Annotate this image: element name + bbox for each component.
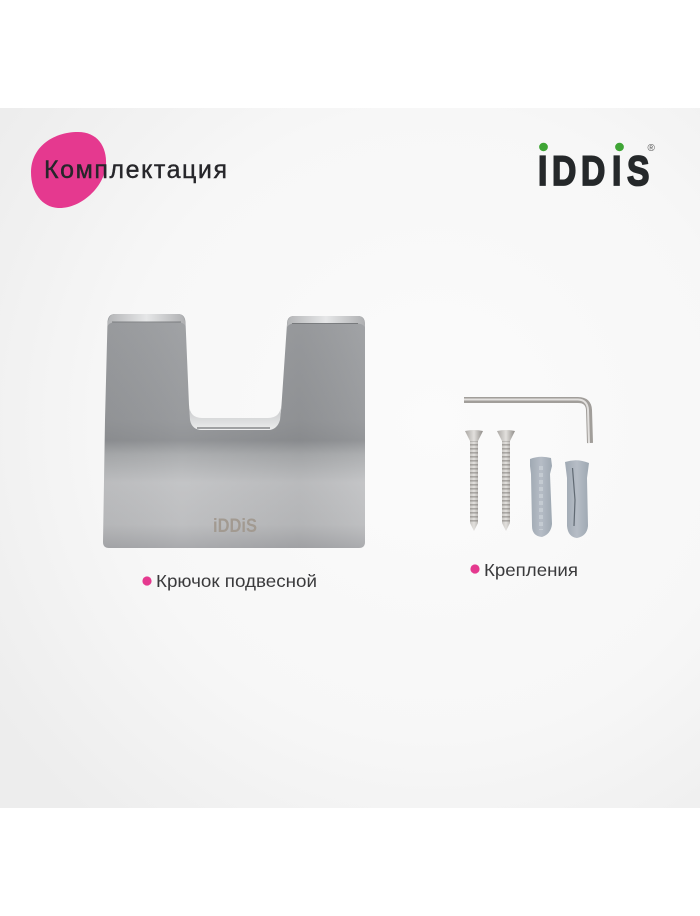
hardware: mounting set bbox=[464, 400, 590, 538]
notch chrome lip bbox=[189, 405, 282, 430]
heading text: Комплектация bbox=[44, 156, 227, 184]
left arm chrome top bbox=[108, 314, 186, 326]
icon: hex key bbox=[464, 400, 590, 443]
right arm chrome top bbox=[287, 316, 365, 327]
label text: Крепления bbox=[484, 560, 578, 580]
registered mark: ® bbox=[648, 143, 656, 154]
engraved logo: iDDiS bbox=[213, 516, 257, 537]
bullet bbox=[142, 576, 152, 586]
logo wordmark: IDDIS bbox=[538, 149, 649, 195]
icon: wall plug 1 bbox=[530, 457, 552, 537]
bullet bbox=[470, 564, 480, 574]
hook body bbox=[103, 314, 365, 548]
heading: Комплектация bbox=[31, 132, 227, 208]
icon: wall plug 2 bbox=[565, 460, 589, 538]
pink blob bbox=[31, 132, 106, 208]
logo green dots bbox=[539, 143, 624, 151]
icon: screw 2 bbox=[497, 430, 515, 531]
label: hook bbox=[142, 571, 317, 591]
label text: Крючок подвесной bbox=[156, 571, 317, 591]
product: wall hook bbox=[103, 314, 365, 548]
photo background panel bbox=[0, 108, 700, 808]
icon: screw 1 bbox=[465, 430, 483, 531]
label: mounts bbox=[470, 560, 578, 580]
brand logo: IDDIS bbox=[538, 143, 656, 195]
